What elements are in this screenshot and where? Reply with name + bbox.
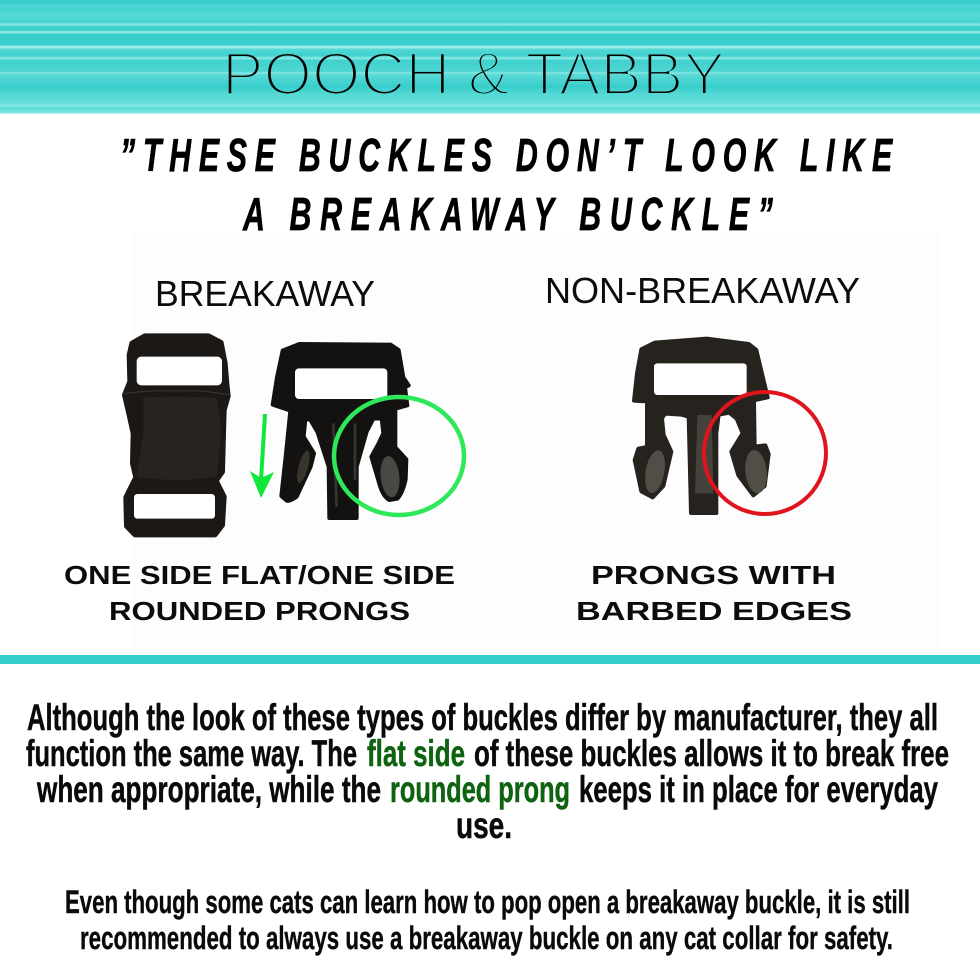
heading line 2: A BREAKAWAY BUCKLE”: [242, 190, 773, 241]
caption: non-breakaway: [576, 560, 852, 626]
paragraph 2: [65, 884, 910, 956]
heading quote: [120, 131, 893, 241]
paragraph 1: [26, 697, 949, 846]
icon: red circle: [704, 392, 826, 514]
label: breakaway: BREAKAWAY: [155, 273, 375, 314]
paragraph 1: rounded prong: [390, 769, 570, 810]
arrow: green down: [250, 414, 274, 498]
icon: green circle: [334, 397, 464, 515]
paragraph 1: function the same way. The: [26, 733, 357, 774]
header band: [0, 0, 980, 114]
caption: breakaway: [64, 560, 455, 626]
caption non-breakaway line 1: PRONGS WITH: [591, 560, 836, 590]
divider band: [0, 655, 980, 664]
paragraph 1: when appropriate, while the: [36, 769, 381, 810]
title: POOCH & TABBY: [222, 40, 725, 108]
icon: non-breakaway buckle half: [634, 339, 769, 513]
icon: breakaway buckle half: [273, 344, 409, 518]
heading line 1: ”THESE BUCKLES DON’T LOOK LIKE: [120, 131, 893, 182]
paragraph 1: flat side: [367, 733, 465, 774]
icon: closed buckle: [124, 336, 230, 535]
photo background: [133, 232, 940, 652]
caption breakaway line 2: ROUNDED PRONGS: [109, 596, 410, 626]
paragraph 1: use.: [456, 805, 512, 846]
caption non-breakaway line 2: BARBED EDGES: [576, 596, 852, 626]
label: non-breakaway: NON-BREAKAWAY: [545, 270, 860, 311]
caption breakaway line 1: ONE SIDE FLAT/ONE SIDE: [64, 560, 455, 590]
